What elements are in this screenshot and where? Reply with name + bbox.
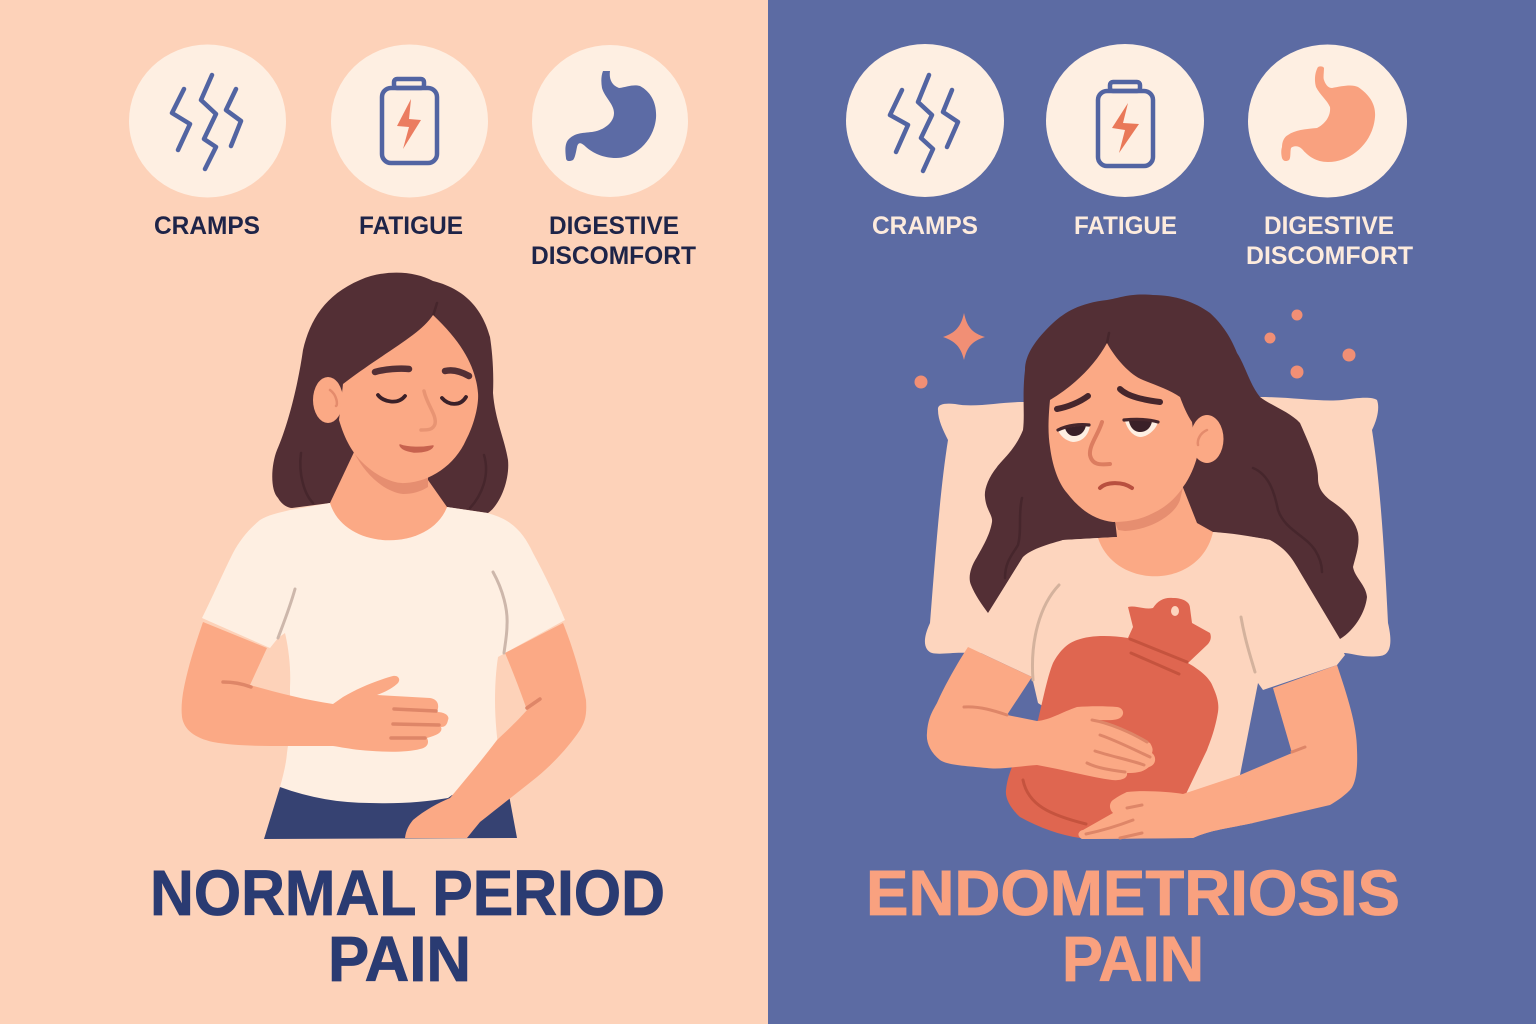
shirt <box>202 503 565 803</box>
illustration: woman lying with hot water bottle <box>927 295 1367 839</box>
ear <box>1190 415 1224 463</box>
label: digestive discomfort <box>531 212 696 270</box>
label: digestive discomfort <box>1246 212 1413 270</box>
ear detail <box>1198 430 1207 445</box>
label: digestive discomfort: DIGESTIVE <box>1264 212 1394 240</box>
panel: endometriosis pain <box>768 0 1536 1024</box>
label: digestive discomfort: DISCOMFORT <box>1246 242 1413 270</box>
neck shadow <box>354 450 428 494</box>
label: cramps: CRAMPS <box>154 212 260 240</box>
panel: normal period pain <box>0 0 768 1024</box>
mouth <box>400 445 433 452</box>
title: endometriosis pain <box>866 857 1400 995</box>
arm: right side down to hip <box>405 623 586 838</box>
neck <box>330 450 447 540</box>
label: digestive discomfort: DIGESTIVE <box>549 212 679 240</box>
lower hand overlay <box>1078 775 1253 839</box>
neck <box>1098 485 1213 576</box>
closed eyes <box>378 395 466 404</box>
hot water bottle <box>1006 598 1218 838</box>
trousers <box>264 787 517 839</box>
shirt <box>968 532 1345 800</box>
eyebrows <box>1057 389 1160 409</box>
title: normal period pain <box>150 857 665 995</box>
bottle lines <box>1023 639 1187 824</box>
label: cramps: CRAMPS <box>872 212 978 240</box>
shirt creases <box>1032 585 1255 680</box>
label: fatigue: FATIGUE <box>1074 212 1177 240</box>
bottle hole <box>1171 606 1179 616</box>
icon: fatigue battery <box>331 44 488 198</box>
nose <box>421 391 435 430</box>
eyebrows <box>375 369 469 376</box>
hair <box>970 295 1367 639</box>
title: endometriosis pain: PAIN <box>1062 923 1204 995</box>
face <box>1048 343 1197 522</box>
face <box>339 315 478 483</box>
icon: fatigue battery <box>1046 44 1204 197</box>
pillow <box>925 397 1390 657</box>
icon: cramps <box>129 44 286 198</box>
title: normal period pain: PAIN <box>328 923 471 995</box>
neck shadow <box>1115 487 1183 531</box>
illustration: woman with hand on stomach <box>182 273 586 839</box>
arm and hand on bottle <box>927 647 1155 780</box>
icon: stomach <box>1248 44 1407 198</box>
hair strands <box>1005 333 1322 578</box>
tired eyes <box>1058 419 1158 442</box>
icon: cramps <box>846 44 1004 197</box>
ear detail <box>330 390 337 406</box>
hand and arm lines <box>964 707 1305 838</box>
title: normal period pain: NORMAL PERIOD <box>150 857 665 929</box>
arm and hand on stomach <box>182 622 448 752</box>
hand and arm lines <box>223 682 540 738</box>
label: digestive discomfort: DISCOMFORT <box>531 242 696 270</box>
nose <box>1090 422 1110 464</box>
label: fatigue: FATIGUE <box>359 212 463 240</box>
hair strands <box>300 303 486 508</box>
mouth <box>1100 483 1132 488</box>
shirt creases <box>278 572 507 653</box>
sparkles and dots <box>914 310 1356 388</box>
title: endometriosis pain: ENDOMETRIOSIS <box>866 857 1400 929</box>
ear <box>313 377 343 423</box>
arm behind: lower right <box>1078 665 1357 839</box>
hair <box>272 273 508 513</box>
icon: stomach <box>532 45 688 197</box>
